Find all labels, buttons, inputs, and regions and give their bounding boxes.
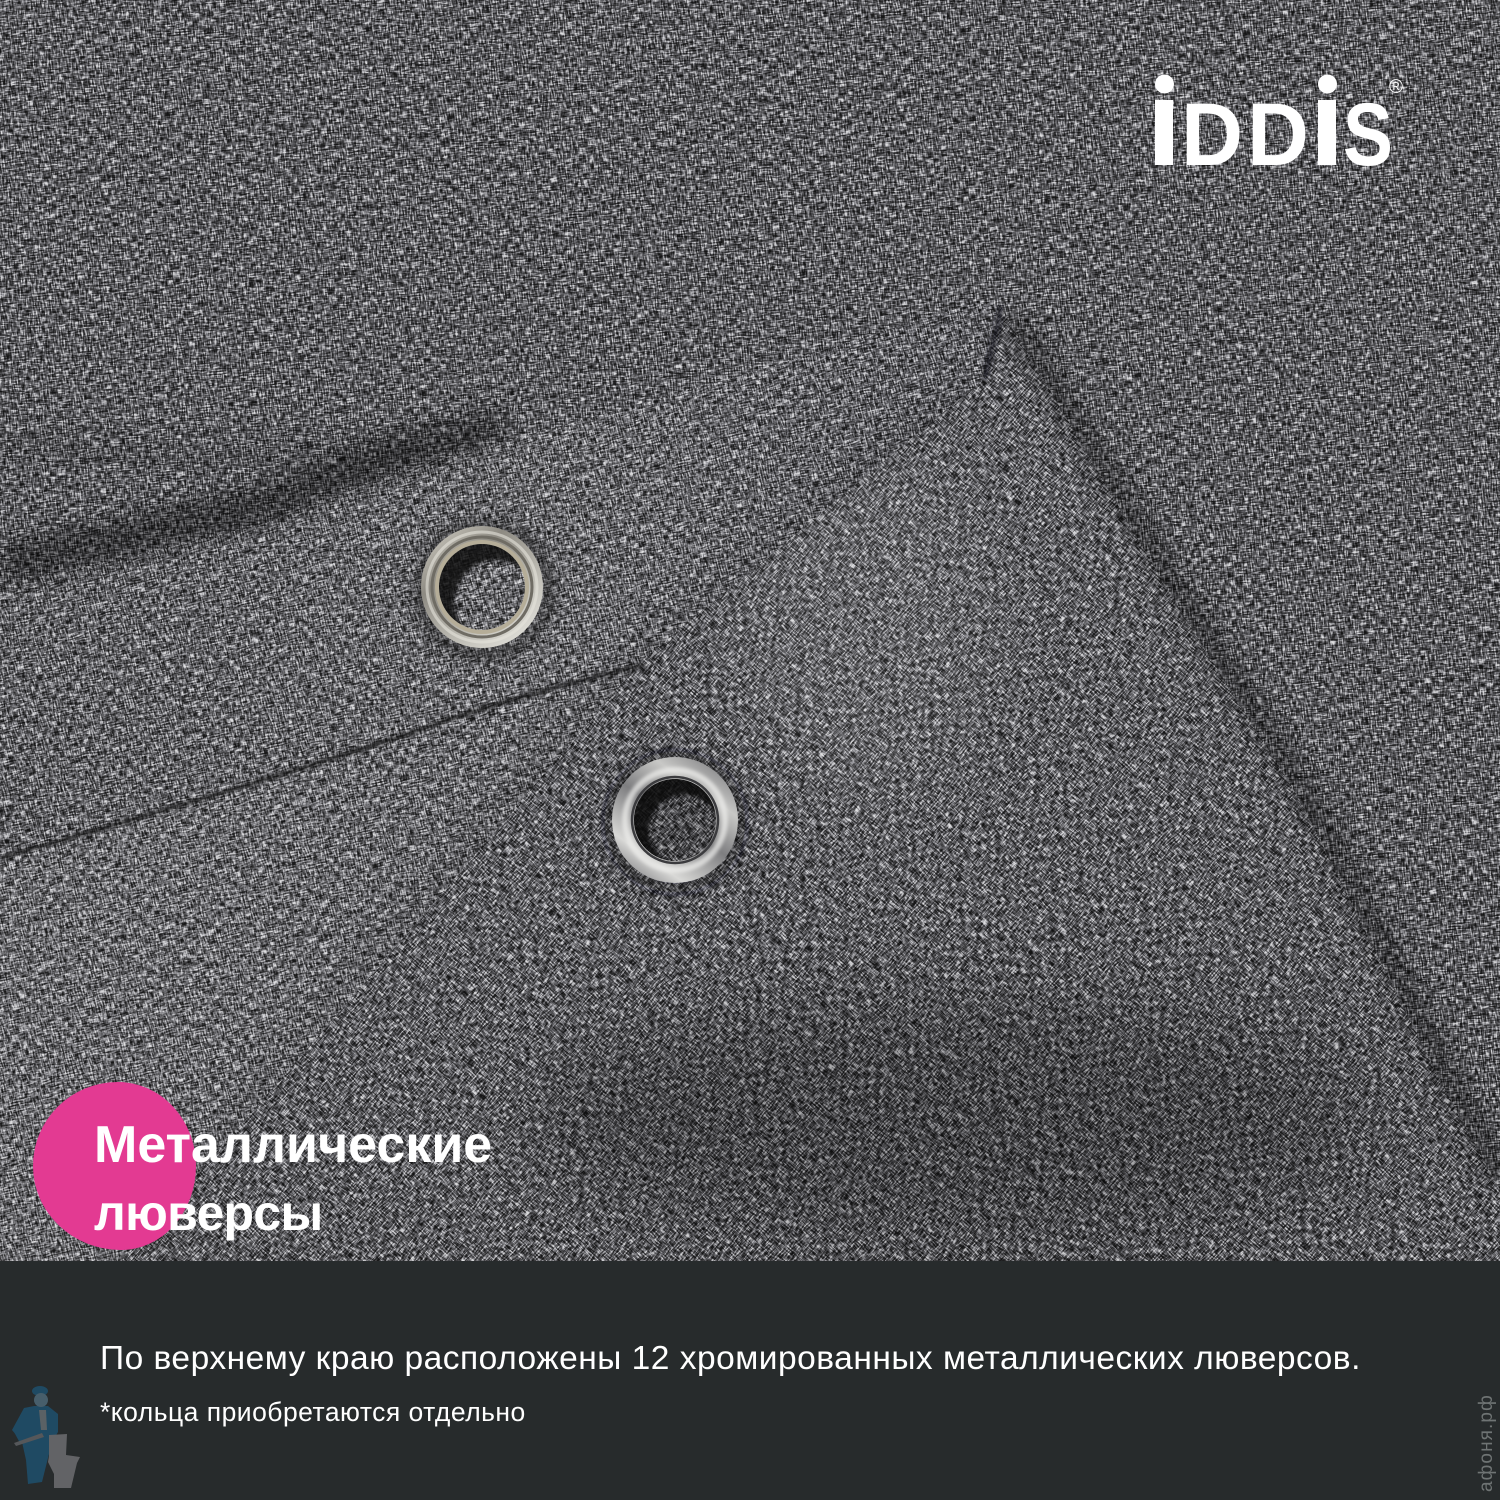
IDDIS logo: D <box>1181 84 1243 184</box>
grommet upper <box>419 525 550 656</box>
flap fabric weave <box>121 307 1500 1261</box>
heading <box>94 1116 492 1240</box>
dark seam line <box>0 664 645 858</box>
IDDIS logo: S <box>1343 84 1393 184</box>
icon: plumber with toilet <box>12 1386 80 1488</box>
front flap of fabric <box>120 306 1500 1262</box>
shade: background wrinkle upper left <box>0 430 420 461</box>
grommet lower <box>609 756 741 888</box>
shade: lighter patch in flap <box>746 466 976 780</box>
heading: Металлические <box>94 1116 492 1174</box>
heading: люверсы <box>94 1184 322 1240</box>
footnote: *кольца приобретаются отдельно <box>100 1397 526 1427</box>
band fabric weave <box>0 303 1000 1261</box>
IDDIS logo <box>1155 74 1403 184</box>
pink accent blob <box>33 1082 196 1250</box>
folded band and lower cloth <box>0 303 1000 1262</box>
description text: По верхнему краю расположены 12 хромированных металлических люверсов. <box>100 1340 1361 1377</box>
IDDIS logo: D <box>1247 84 1309 184</box>
shade: background shadow above band <box>0 408 500 585</box>
shade: darker patch in flap <box>530 1000 1370 1240</box>
IDDIS logo: ® <box>1389 77 1403 98</box>
lower cloth lighter area <box>0 665 640 1262</box>
bottom dark panel: афоня.рф <box>1476 1394 1497 1492</box>
shade: shadow beside right flap edge <box>1012 320 1500 1180</box>
dark crease near the fold <box>985 306 1002 378</box>
shade: shadow below flap left edge <box>130 385 970 1250</box>
bottom dark panel <box>0 1261 1500 1500</box>
